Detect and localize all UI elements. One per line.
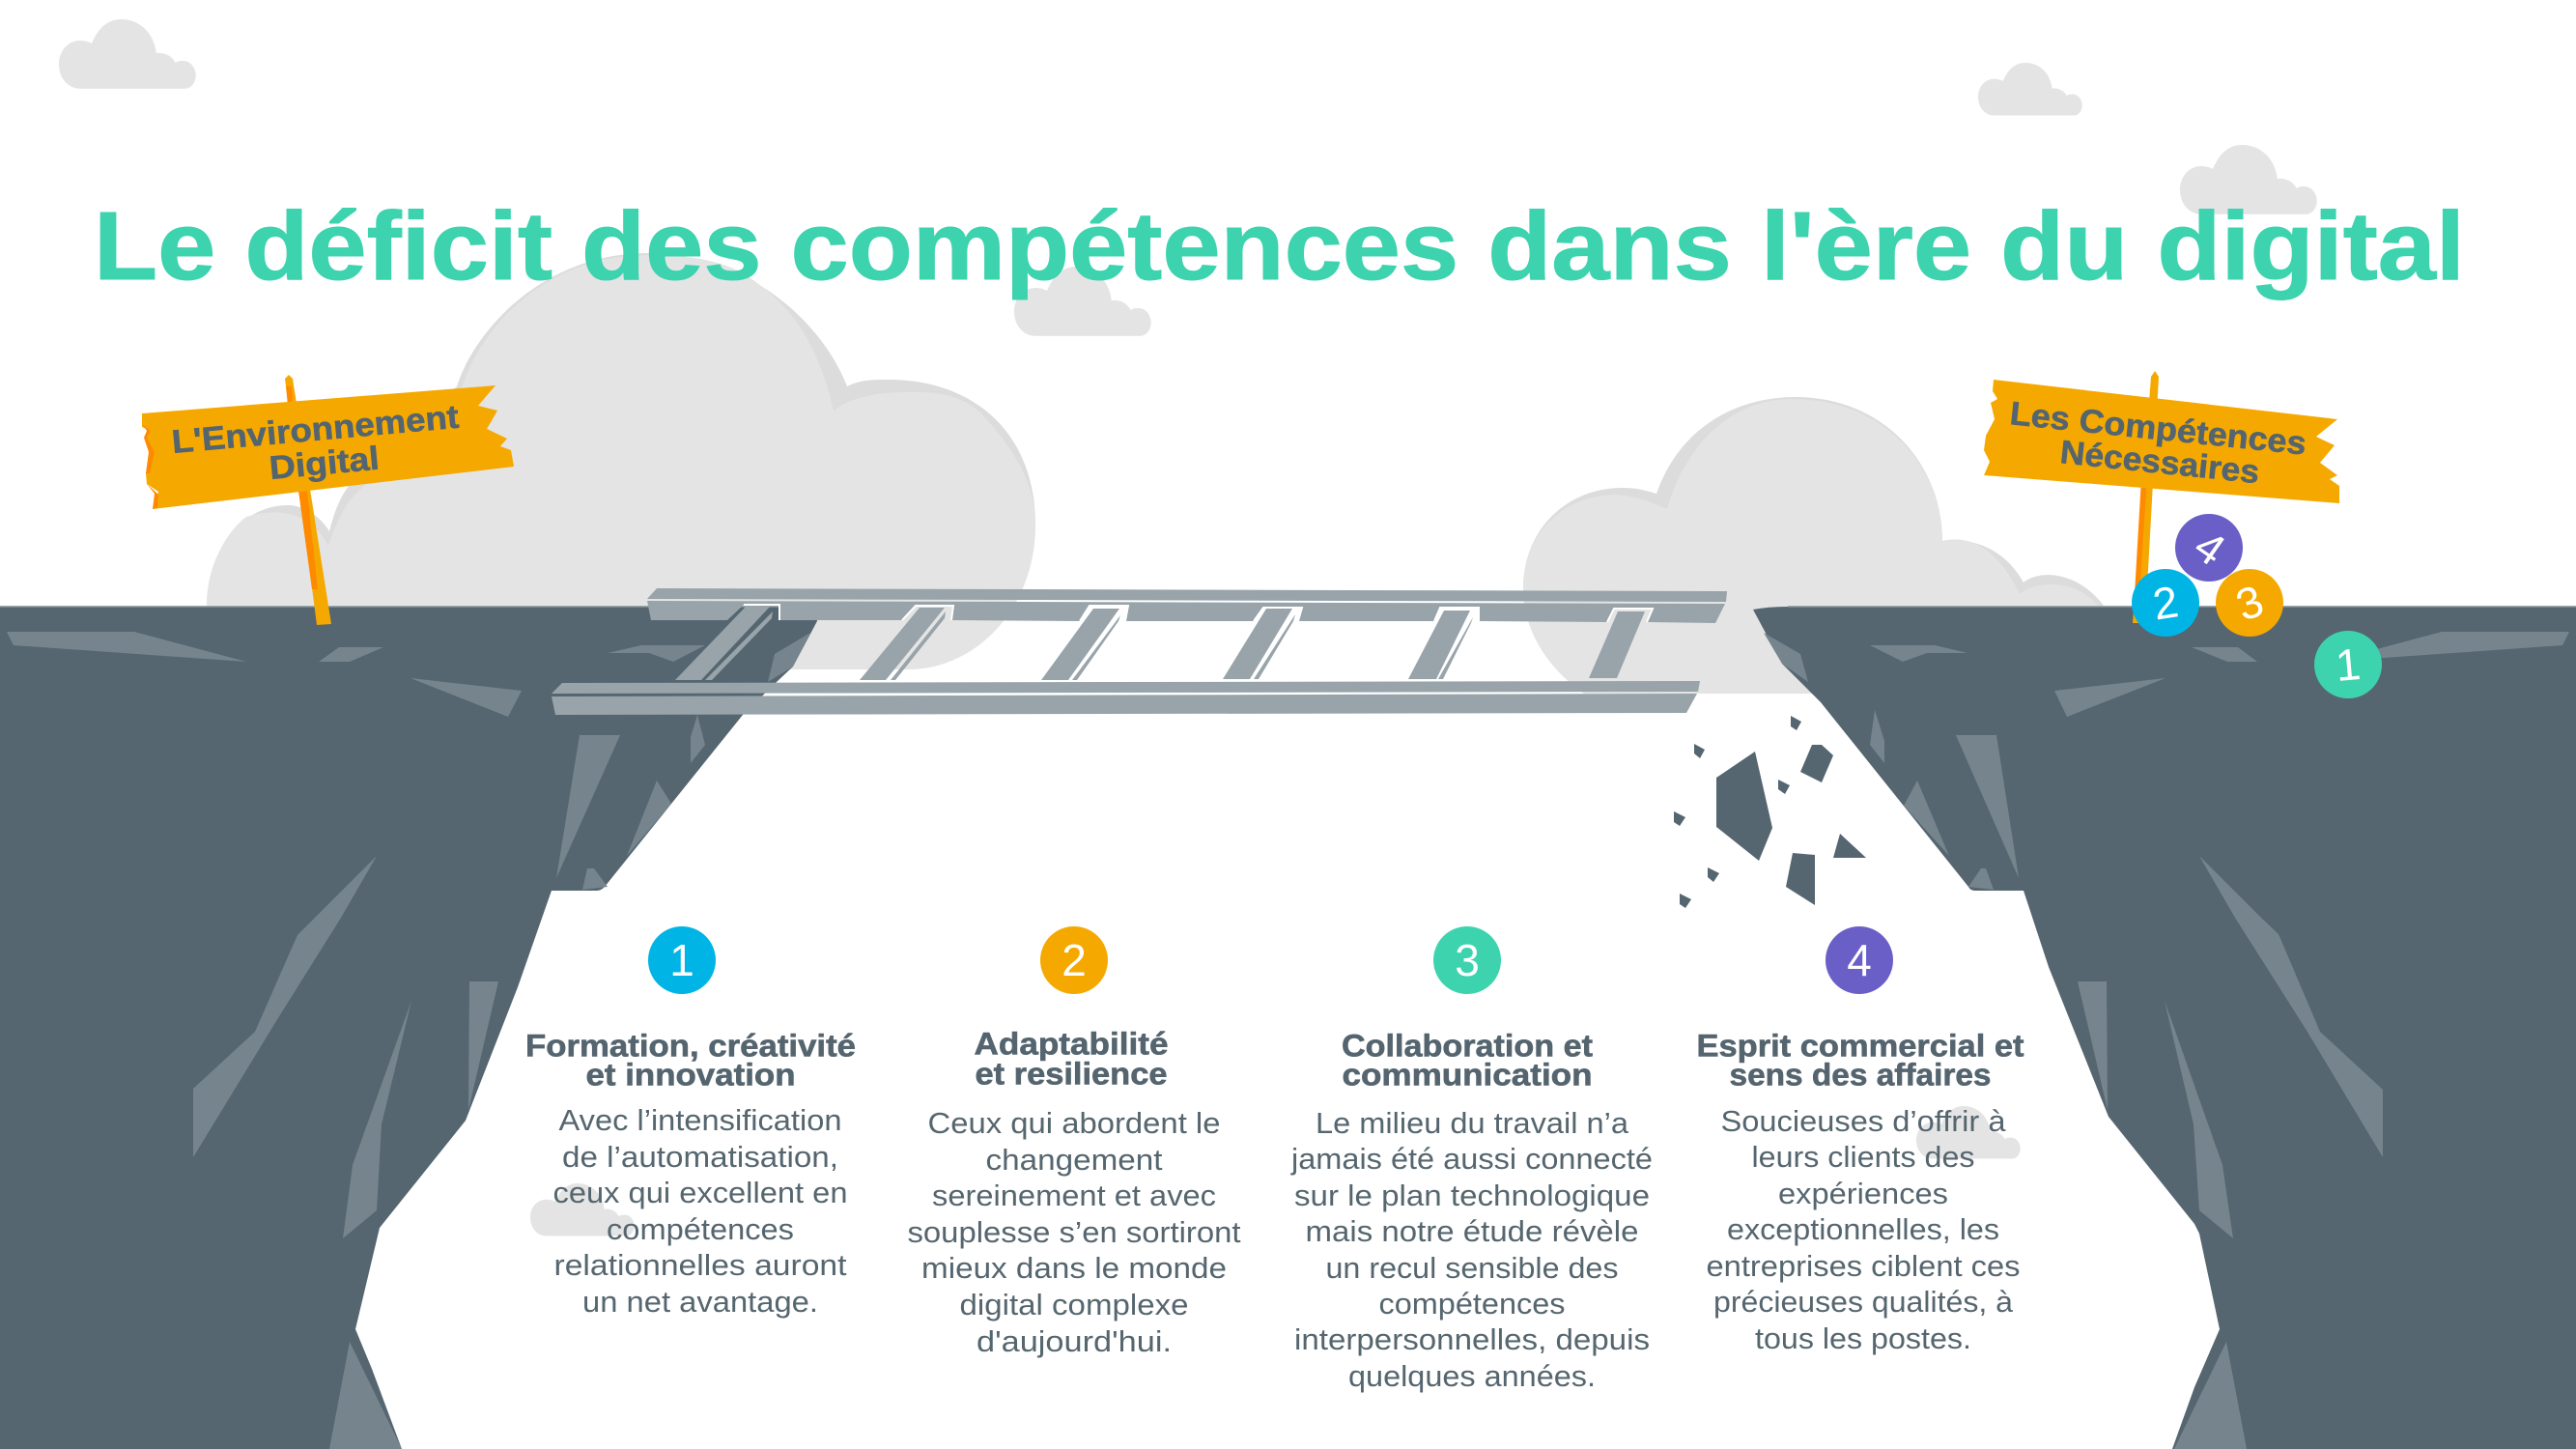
broken ladder bridge <box>552 588 1727 715</box>
body text 4: précieuses qualités, à <box>1713 1285 2014 1319</box>
heading 4: Esprit commercial et <box>1696 1028 2024 1063</box>
right signpost <box>1984 371 2339 623</box>
number badge 4: 4 <box>1847 935 1872 985</box>
heading 4 <box>1696 1028 2024 1092</box>
small cloud top right <box>1978 63 2082 115</box>
badge 4 on cliff <box>2175 514 2243 582</box>
body text 2 <box>908 1106 1241 1358</box>
body text 3: interpersonnelles, depuis <box>1294 1322 1650 1356</box>
badge 2 on cliff: 2 <box>2149 576 2182 630</box>
body text 1: relationnelles auront <box>554 1248 847 1282</box>
small cloud top left <box>59 19 196 89</box>
right post <box>2133 371 2159 623</box>
body text 4: expériences <box>1778 1177 1948 1210</box>
body text 4: entreprises ciblent ces <box>1706 1249 2021 1283</box>
number badge 3 <box>1433 926 1501 994</box>
number badge 3: 3 <box>1455 935 1480 985</box>
body text 1: ceux qui excellent en <box>552 1176 848 1209</box>
right post shade <box>2134 478 2147 611</box>
body text 3: Le milieu du travail n’a <box>1316 1106 1629 1140</box>
body text 2: d'aujourd'hui. <box>977 1324 1172 1358</box>
heading 4: sens des affaires <box>1729 1057 1992 1092</box>
left sign text: L'Environnement <box>170 399 461 461</box>
left post shade <box>286 386 318 589</box>
badge 3 on cliff <box>2216 569 2283 637</box>
large cloud left <box>207 253 1035 669</box>
title: Le déficit des compétences dans l'ère du digital <box>94 192 2465 300</box>
right sign text <box>2008 395 2307 491</box>
right sign text: Nécessaires <box>2058 434 2261 491</box>
body text 3: mais notre étude révèle <box>1306 1214 1638 1248</box>
body text 1: de l’automatisation, <box>562 1140 838 1174</box>
left post <box>285 375 331 625</box>
number badge 2: 2 <box>1062 935 1087 985</box>
right sign board <box>1984 380 2339 503</box>
body text 4 <box>1706 1104 2021 1355</box>
column 2: adaptabilite <box>908 926 1241 1358</box>
badge 2 on cliff <box>2132 569 2199 637</box>
badge 1 on cliff: 1 <box>2334 639 2363 691</box>
body text 1 <box>552 1103 848 1319</box>
column 4: esprit commercial <box>1696 926 2024 1355</box>
body text 2: changement <box>985 1143 1163 1177</box>
badge 1 on cliff <box>2314 631 2382 698</box>
heading 1 <box>525 1028 856 1092</box>
left board torn edge <box>143 425 158 509</box>
column 3: collaboration <box>1290 926 1653 1393</box>
heading 3 <box>1342 1028 1593 1092</box>
number badge 1: 1 <box>669 935 694 985</box>
left sign text: Digital <box>268 440 381 487</box>
body text 1: Avec l’intensification <box>558 1103 842 1137</box>
small cloud far right <box>2180 145 2317 214</box>
body text 4: tous les postes. <box>1755 1321 1971 1355</box>
body text 3: quelques années. <box>1348 1359 1596 1393</box>
body text 1: un net avantage. <box>582 1285 818 1319</box>
body text 3: sur le plan technologique <box>1294 1179 1650 1212</box>
small cloud behind column 4 <box>1916 1106 2021 1158</box>
large cloud right <box>1523 397 2104 694</box>
left signpost <box>142 375 514 625</box>
number badge 1 <box>648 926 716 994</box>
heading 3: communication <box>1343 1057 1592 1092</box>
heading 3: Collaboration et <box>1342 1028 1593 1063</box>
badge 3 on cliff: 3 <box>2229 575 2270 631</box>
body text 2: souplesse s’en sortiront <box>908 1215 1241 1249</box>
heading 2: et resilience <box>976 1057 1167 1092</box>
heading 1: Formation, créativité <box>525 1028 856 1063</box>
body text 3 <box>1290 1106 1653 1393</box>
number badge 4 <box>1826 926 1893 994</box>
small cloud under title <box>1014 267 1151 336</box>
small cloud behind column 1 <box>530 1183 635 1236</box>
right cliff <box>1753 606 2576 1449</box>
body text 3: jamais été aussi connecté <box>1290 1142 1653 1176</box>
right sign text: Les Compétences <box>2008 395 2307 463</box>
body text 2: sereinement et avec <box>932 1179 1216 1212</box>
heading 1: et innovation <box>585 1057 796 1092</box>
left cliff <box>0 606 817 1449</box>
falling rocks <box>1674 716 1866 908</box>
body text 4: exceptionnelles, les <box>1727 1212 1999 1246</box>
column 1: formation <box>525 926 856 1319</box>
body text 1: compétences <box>607 1212 794 1246</box>
body text 2: digital complexe <box>960 1288 1188 1321</box>
badge 4 on cliff: 4 <box>2186 520 2234 576</box>
body text 2: Ceux qui abordent le <box>927 1106 1221 1140</box>
number badge 2 <box>1040 926 1108 994</box>
heading 2: Adaptabilité <box>974 1026 1169 1061</box>
body text 3: compétences <box>1379 1287 1565 1321</box>
heading 2 <box>974 1026 1169 1092</box>
left sign board <box>142 385 514 509</box>
body text 3: un recul sensible des <box>1325 1251 1619 1285</box>
body text 4: leurs clients des <box>1752 1140 1974 1174</box>
body text 2: mieux dans le monde <box>921 1251 1227 1285</box>
body text 4: Soucieuses d’offrir à <box>1721 1104 2006 1138</box>
left sign text <box>170 399 461 487</box>
